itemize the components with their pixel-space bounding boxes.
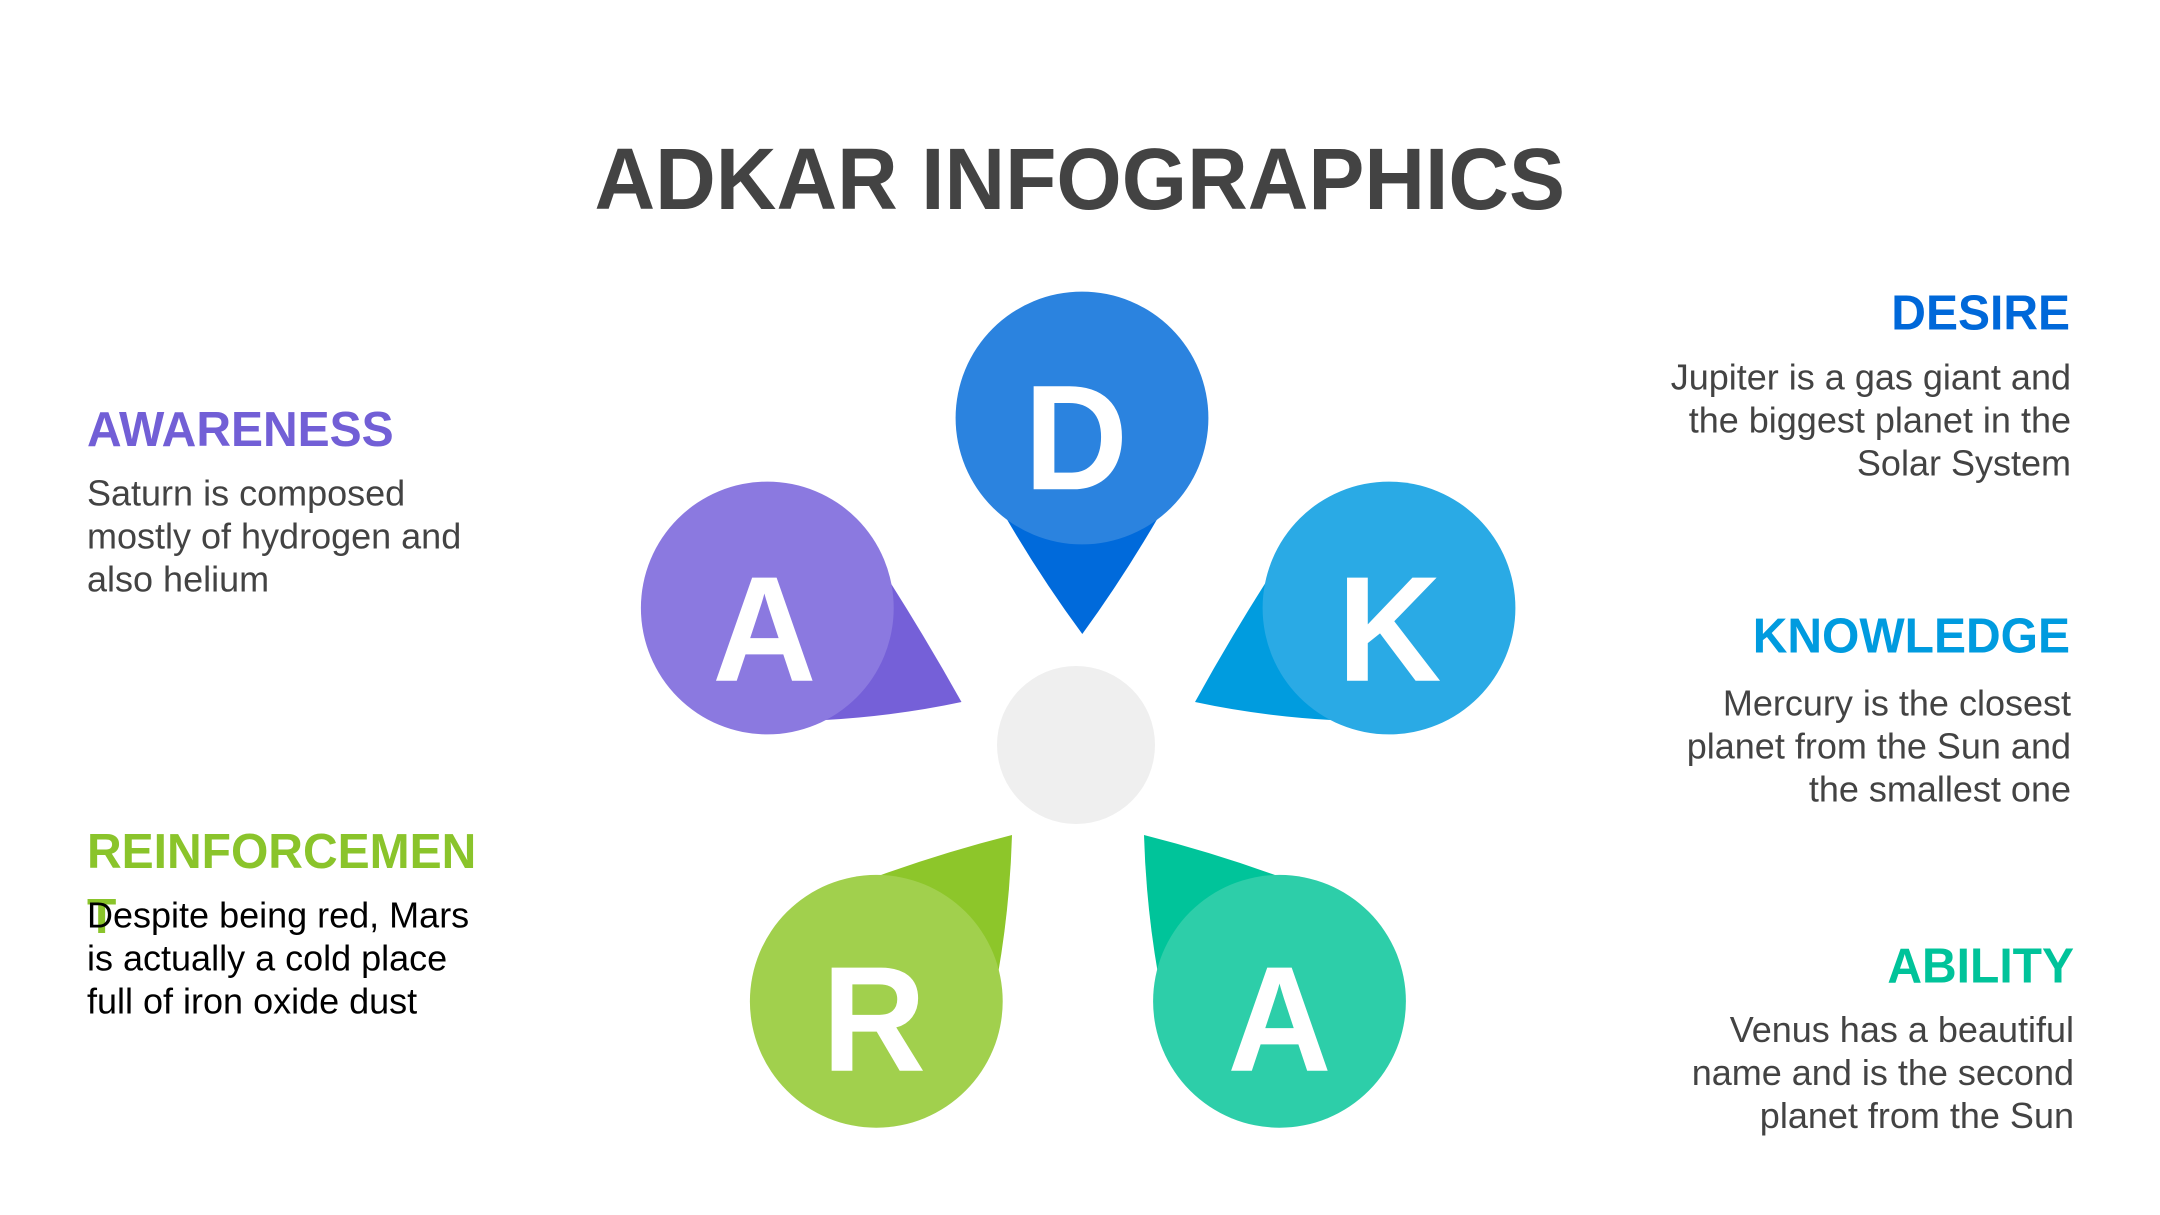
text: awareness: also helium <box>87 558 269 600</box>
panel: reinforcement <box>87 824 476 1022</box>
heading: desire: DESIRE <box>1891 286 2070 341</box>
heading: reinforcement: REINFORCEMEN <box>87 824 476 879</box>
text: reinforcement: Despite being red, Mars <box>87 894 469 936</box>
panel: desire <box>1671 286 2071 484</box>
petal: K: K <box>1337 546 1441 713</box>
diagram: ADKAR flower <box>641 292 1515 1128</box>
text: knowledge: planet from the Sun and <box>1687 726 2071 766</box>
heading: reinforcement: T <box>87 889 117 944</box>
panel: knowledge <box>1687 609 2071 810</box>
text: desire: the biggest planet in the <box>1689 400 2071 440</box>
text: desire: Jupiter is a gas giant and <box>1671 356 2071 398</box>
text: awareness: mostly of hydrogen and <box>87 516 461 556</box>
text: awareness: Saturn is composed <box>87 472 405 514</box>
petal: D <box>956 292 1208 634</box>
panel: awareness <box>87 402 461 600</box>
petal: R: R <box>822 936 926 1103</box>
petal: A right: A <box>1228 936 1331 1103</box>
petal: A left <box>641 482 962 734</box>
heading: knowledge: KNOWLEDGE <box>1753 609 2070 664</box>
panel: ability <box>1692 939 2074 1136</box>
title: ADKAR INFOGRAPHICS <box>594 131 1565 228</box>
petal: D: D <box>1024 355 1128 522</box>
text: reinforcement: is actually a cold place <box>87 938 447 978</box>
text: knowledge: the smallest one <box>1809 768 2071 810</box>
petal: K <box>1195 482 1515 734</box>
text: desire: Solar System <box>1857 442 2071 484</box>
text: ability: name and is the second <box>1692 1052 2074 1093</box>
text: ability: planet from the Sun <box>1760 1095 2074 1136</box>
text: knowledge: Mercury is the closest <box>1723 682 2071 724</box>
petal: A left: A <box>712 546 816 713</box>
heading: ability: ABILITY <box>1887 939 2074 994</box>
text: reinforcement: full of iron oxide dust <box>87 980 417 1022</box>
petal: A right <box>1144 835 1406 1128</box>
center circle <box>997 666 1155 824</box>
heading: awareness: AWARENESS <box>87 402 394 457</box>
text: ability: Venus has a beautiful <box>1730 1009 2074 1050</box>
petal: R <box>750 835 1012 1128</box>
